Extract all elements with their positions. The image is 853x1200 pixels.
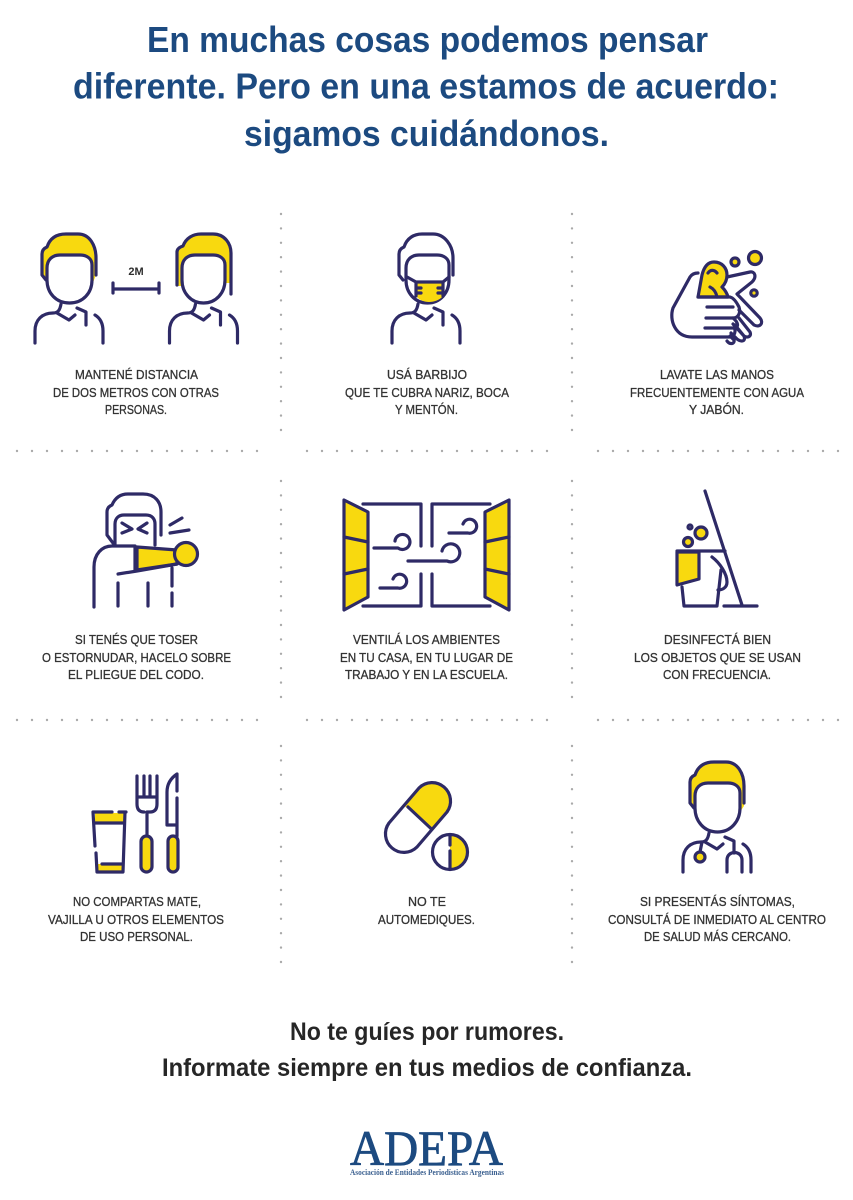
caption: Y JABÓN. <box>689 402 744 417</box>
caption: LAVATE LAS MANOS <box>660 368 774 382</box>
panel: desinfectar <box>634 491 801 682</box>
closing message <box>162 1018 692 1082</box>
caption: DESINFECTÁ BIEN <box>664 632 771 647</box>
caption: LOS OBJETOS QUE SE USAN <box>634 651 801 665</box>
title: diferente. Pero en una estamos de acuerdo: <box>73 66 779 106</box>
title: En muchas cosas podemos pensar <box>147 19 708 60</box>
caption <box>378 895 475 927</box>
caption <box>340 632 513 682</box>
panel: ventilar <box>340 500 513 682</box>
icon: glass, fork and knife <box>93 774 178 872</box>
caption: QUE TE CUBRA NARIZ, BOCA <box>345 386 510 400</box>
caption: DE SALUD MÁS CERCANO. <box>644 929 791 944</box>
caption: VAJILLA U OTROS ELEMENTOS <box>48 913 224 927</box>
caption: CON FRECUENCIA. <box>663 668 771 682</box>
caption: EN TU CASA, EN TU LUGAR DE <box>340 651 513 665</box>
caption <box>42 632 231 682</box>
caption <box>48 895 224 944</box>
caption: SI PRESENTÁS SÍNTOMAS, <box>640 894 795 909</box>
closing message: Informate siempre en tus medios de confianza. <box>162 1054 692 1082</box>
panel: manos <box>630 252 805 417</box>
caption <box>634 632 801 682</box>
caption <box>53 367 219 417</box>
caption: O ESTORNUDAR, HACELO SOBRE <box>42 651 231 665</box>
panel: barbijo <box>345 234 510 417</box>
caption: TRABAJO Y EN LA ESCUELA. <box>345 668 508 682</box>
icon: washing hands <box>672 252 762 344</box>
title: sigamos cuidándonos. <box>244 113 609 154</box>
panel: toser <box>42 494 231 682</box>
icon: doctor with stethoscope <box>683 762 751 872</box>
caption: DE DOS METROS CON OTRAS <box>53 386 219 400</box>
caption: CONSULTÁ DE INMEDIATO AL CENTRO <box>608 912 826 927</box>
logo: ADEPA: Asociación de Entidades Periodísticas Argentinas <box>350 1167 505 1177</box>
panel: vajilla <box>48 774 224 944</box>
caption <box>345 367 510 417</box>
caption: NO COMPARTAS MATE, <box>73 895 201 909</box>
caption: DE USO PERSONAL. <box>80 930 193 944</box>
caption: Y MENTÓN. <box>395 402 458 417</box>
panel: distancia <box>35 234 238 417</box>
panel: síntomas <box>608 762 826 944</box>
closing message: No te guíes por rumores. <box>290 1018 564 1046</box>
icon: person with mask <box>392 234 460 343</box>
icon: open window with wind <box>344 500 509 610</box>
logo: ADEPA: ADEPA <box>350 1120 503 1176</box>
caption: SI TENÉS QUE TOSER <box>75 632 198 647</box>
caption <box>608 894 826 944</box>
title <box>73 19 779 154</box>
icon: two people two metres apart <box>35 234 238 343</box>
icon: two people two metres apart: 2M <box>128 266 144 278</box>
caption: AUTOMEDIQUES. <box>378 913 475 927</box>
caption <box>630 368 805 417</box>
panel: automedicar <box>378 783 475 927</box>
caption: EL PLIEGUE DEL CODO. <box>68 668 204 682</box>
caption: MANTENÉ DISTANCIA <box>75 367 199 382</box>
icon: capsule and tablet <box>385 783 468 870</box>
caption: PERSONAS. <box>105 403 167 417</box>
icon: bucket and mop <box>677 491 757 606</box>
icon: coughing into elbow <box>94 494 198 607</box>
caption: NO TE <box>408 895 446 909</box>
caption: USÁ BARBIJO <box>387 367 467 382</box>
caption: VENTILÁ LOS AMBIENTES <box>353 632 500 647</box>
caption: FRECUENTEMENTE CON AGUA <box>630 386 805 400</box>
